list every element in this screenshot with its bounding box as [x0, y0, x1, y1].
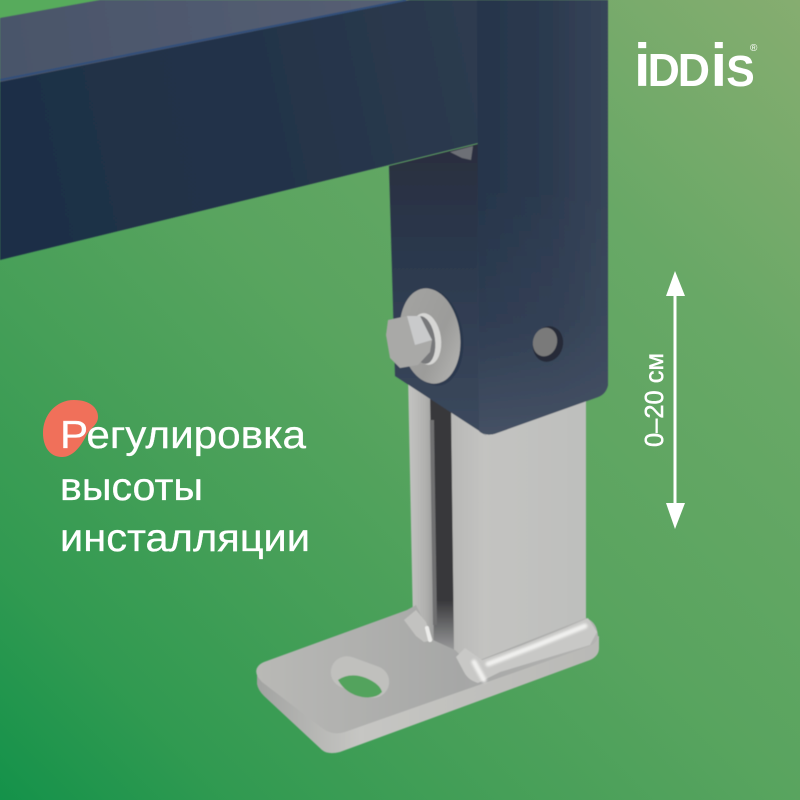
- small spring washer: [408, 311, 444, 367]
- gap fading into reflection at the bottom: [433, 600, 456, 655]
- base plate side edge: [257, 636, 599, 753]
- large washer: [394, 284, 466, 388]
- bottom arrowhead: [666, 503, 685, 529]
- headline line 3: инсталляции: [60, 517, 310, 560]
- green corner above the frame: [0, 0, 100, 20]
- top arrowhead: [666, 271, 685, 296]
- base plate top face: [256, 605, 598, 733]
- logo: iDDiS: [634, 31, 758, 99]
- steel leg front face: [451, 390, 586, 664]
- green opening through slot: [338, 675, 382, 697]
- logo wordmark: S: [726, 47, 755, 96]
- headline line 1: Регулировка: [60, 414, 306, 457]
- registered mark: ®: [750, 43, 758, 54]
- height range label: 0–20 см: [639, 353, 669, 447]
- red accent blob: [43, 400, 98, 457]
- slotted hole in plate: [326, 652, 394, 702]
- logo wordmark: i: [711, 31, 727, 99]
- metal installation frame: [0, 0, 608, 753]
- lower steel leg: [408, 375, 586, 664]
- weld bright ridge: [474, 626, 585, 680]
- left weld bright tip: [427, 628, 430, 640]
- logo wordmark: D: [648, 44, 680, 96]
- hole in front face: [529, 323, 567, 365]
- logo wordmark: i: [634, 31, 650, 99]
- height range arrow: [666, 271, 685, 529]
- beam top surface: [0, 0, 412, 84]
- arrow shaft: [674, 290, 676, 510]
- post shading: [477, 180, 608, 435]
- headline text: [60, 414, 310, 560]
- dark gap in the leg: [430, 390, 456, 655]
- hex bolt head: [386, 316, 432, 368]
- logo wordmark: D: [678, 44, 710, 96]
- flange inner edge: [430, 420, 437, 625]
- hex bolt facet: [407, 316, 432, 345]
- hole rim: [529, 323, 567, 365]
- spring washer inner: [408, 315, 438, 365]
- washer shadow: [396, 284, 470, 390]
- left weld: [404, 610, 433, 642]
- hole inner shading: [530, 325, 560, 359]
- beam front face: [0, 0, 482, 260]
- bolt with washer: [386, 284, 470, 390]
- small gusset under beam: [450, 146, 473, 160]
- sleeve lower front face: [477, 0, 608, 435]
- beam top edge highlight: [0, 0, 406, 80]
- steel leg left flange: [408, 375, 438, 655]
- weld highlights: [474, 626, 585, 680]
- sleeve side face: [389, 144, 487, 436]
- base plate: [256, 605, 599, 753]
- headline line 2: высоты: [60, 466, 203, 509]
- front weld bead: [456, 618, 597, 683]
